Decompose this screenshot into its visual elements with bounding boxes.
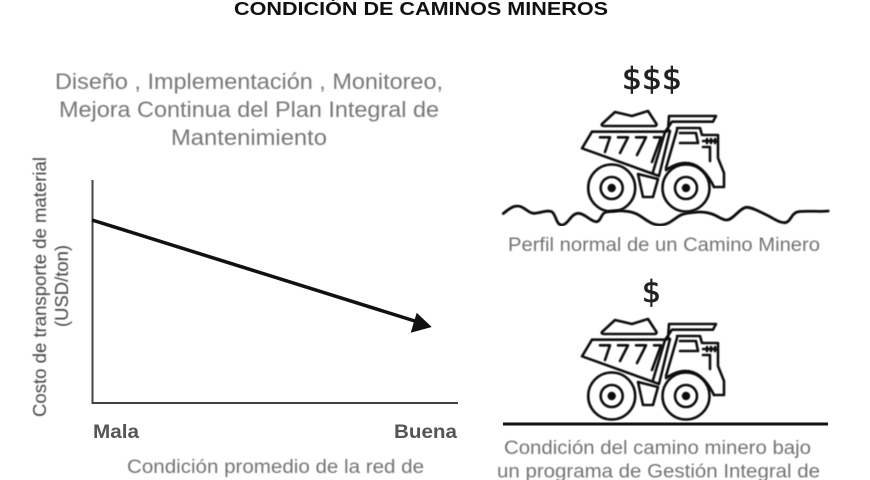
chart axes bbox=[92, 180, 458, 403]
y axis label: Costo de transporte de material bbox=[30, 157, 50, 417]
rough road line bbox=[503, 206, 828, 225]
x axis label: Buena: Buena bbox=[394, 422, 457, 443]
arrow: cost trend line bbox=[92, 220, 432, 333]
icon: mining truck on flat road bbox=[582, 319, 724, 420]
heading: plan integral de mantenimiento: Mantenimiento bbox=[171, 125, 327, 150]
caption: normal road: Perfil normal de un Camino Minero bbox=[508, 235, 820, 256]
heading: plan integral de mantenimiento bbox=[55, 69, 443, 150]
cost symbol: one dollar: $ bbox=[642, 275, 661, 310]
x axis label: Mala: Mala bbox=[93, 422, 139, 443]
heading: plan integral de mantenimiento: Diseño , Implementación , Monitoreo, bbox=[55, 69, 443, 94]
panel: managed road bbox=[497, 275, 828, 480]
x axis caption: Condición promedio de la red de bbox=[127, 457, 424, 478]
heading: plan integral de mantenimiento: Mejora Continua del Plan Integral de bbox=[59, 97, 439, 122]
flat road line bbox=[503, 422, 828, 426]
caption: managed road: Condición del camino minero bajo bbox=[504, 438, 811, 459]
cost symbol: three dollars: $$$ bbox=[622, 62, 682, 97]
panel: cost chart bbox=[30, 69, 458, 478]
y axis label: (USD/ton) bbox=[52, 245, 72, 327]
caption: managed road bbox=[497, 438, 820, 480]
icon: mining truck on rough road bbox=[582, 111, 724, 212]
panel: normal road profile bbox=[503, 62, 828, 256]
y axis label bbox=[30, 157, 72, 417]
